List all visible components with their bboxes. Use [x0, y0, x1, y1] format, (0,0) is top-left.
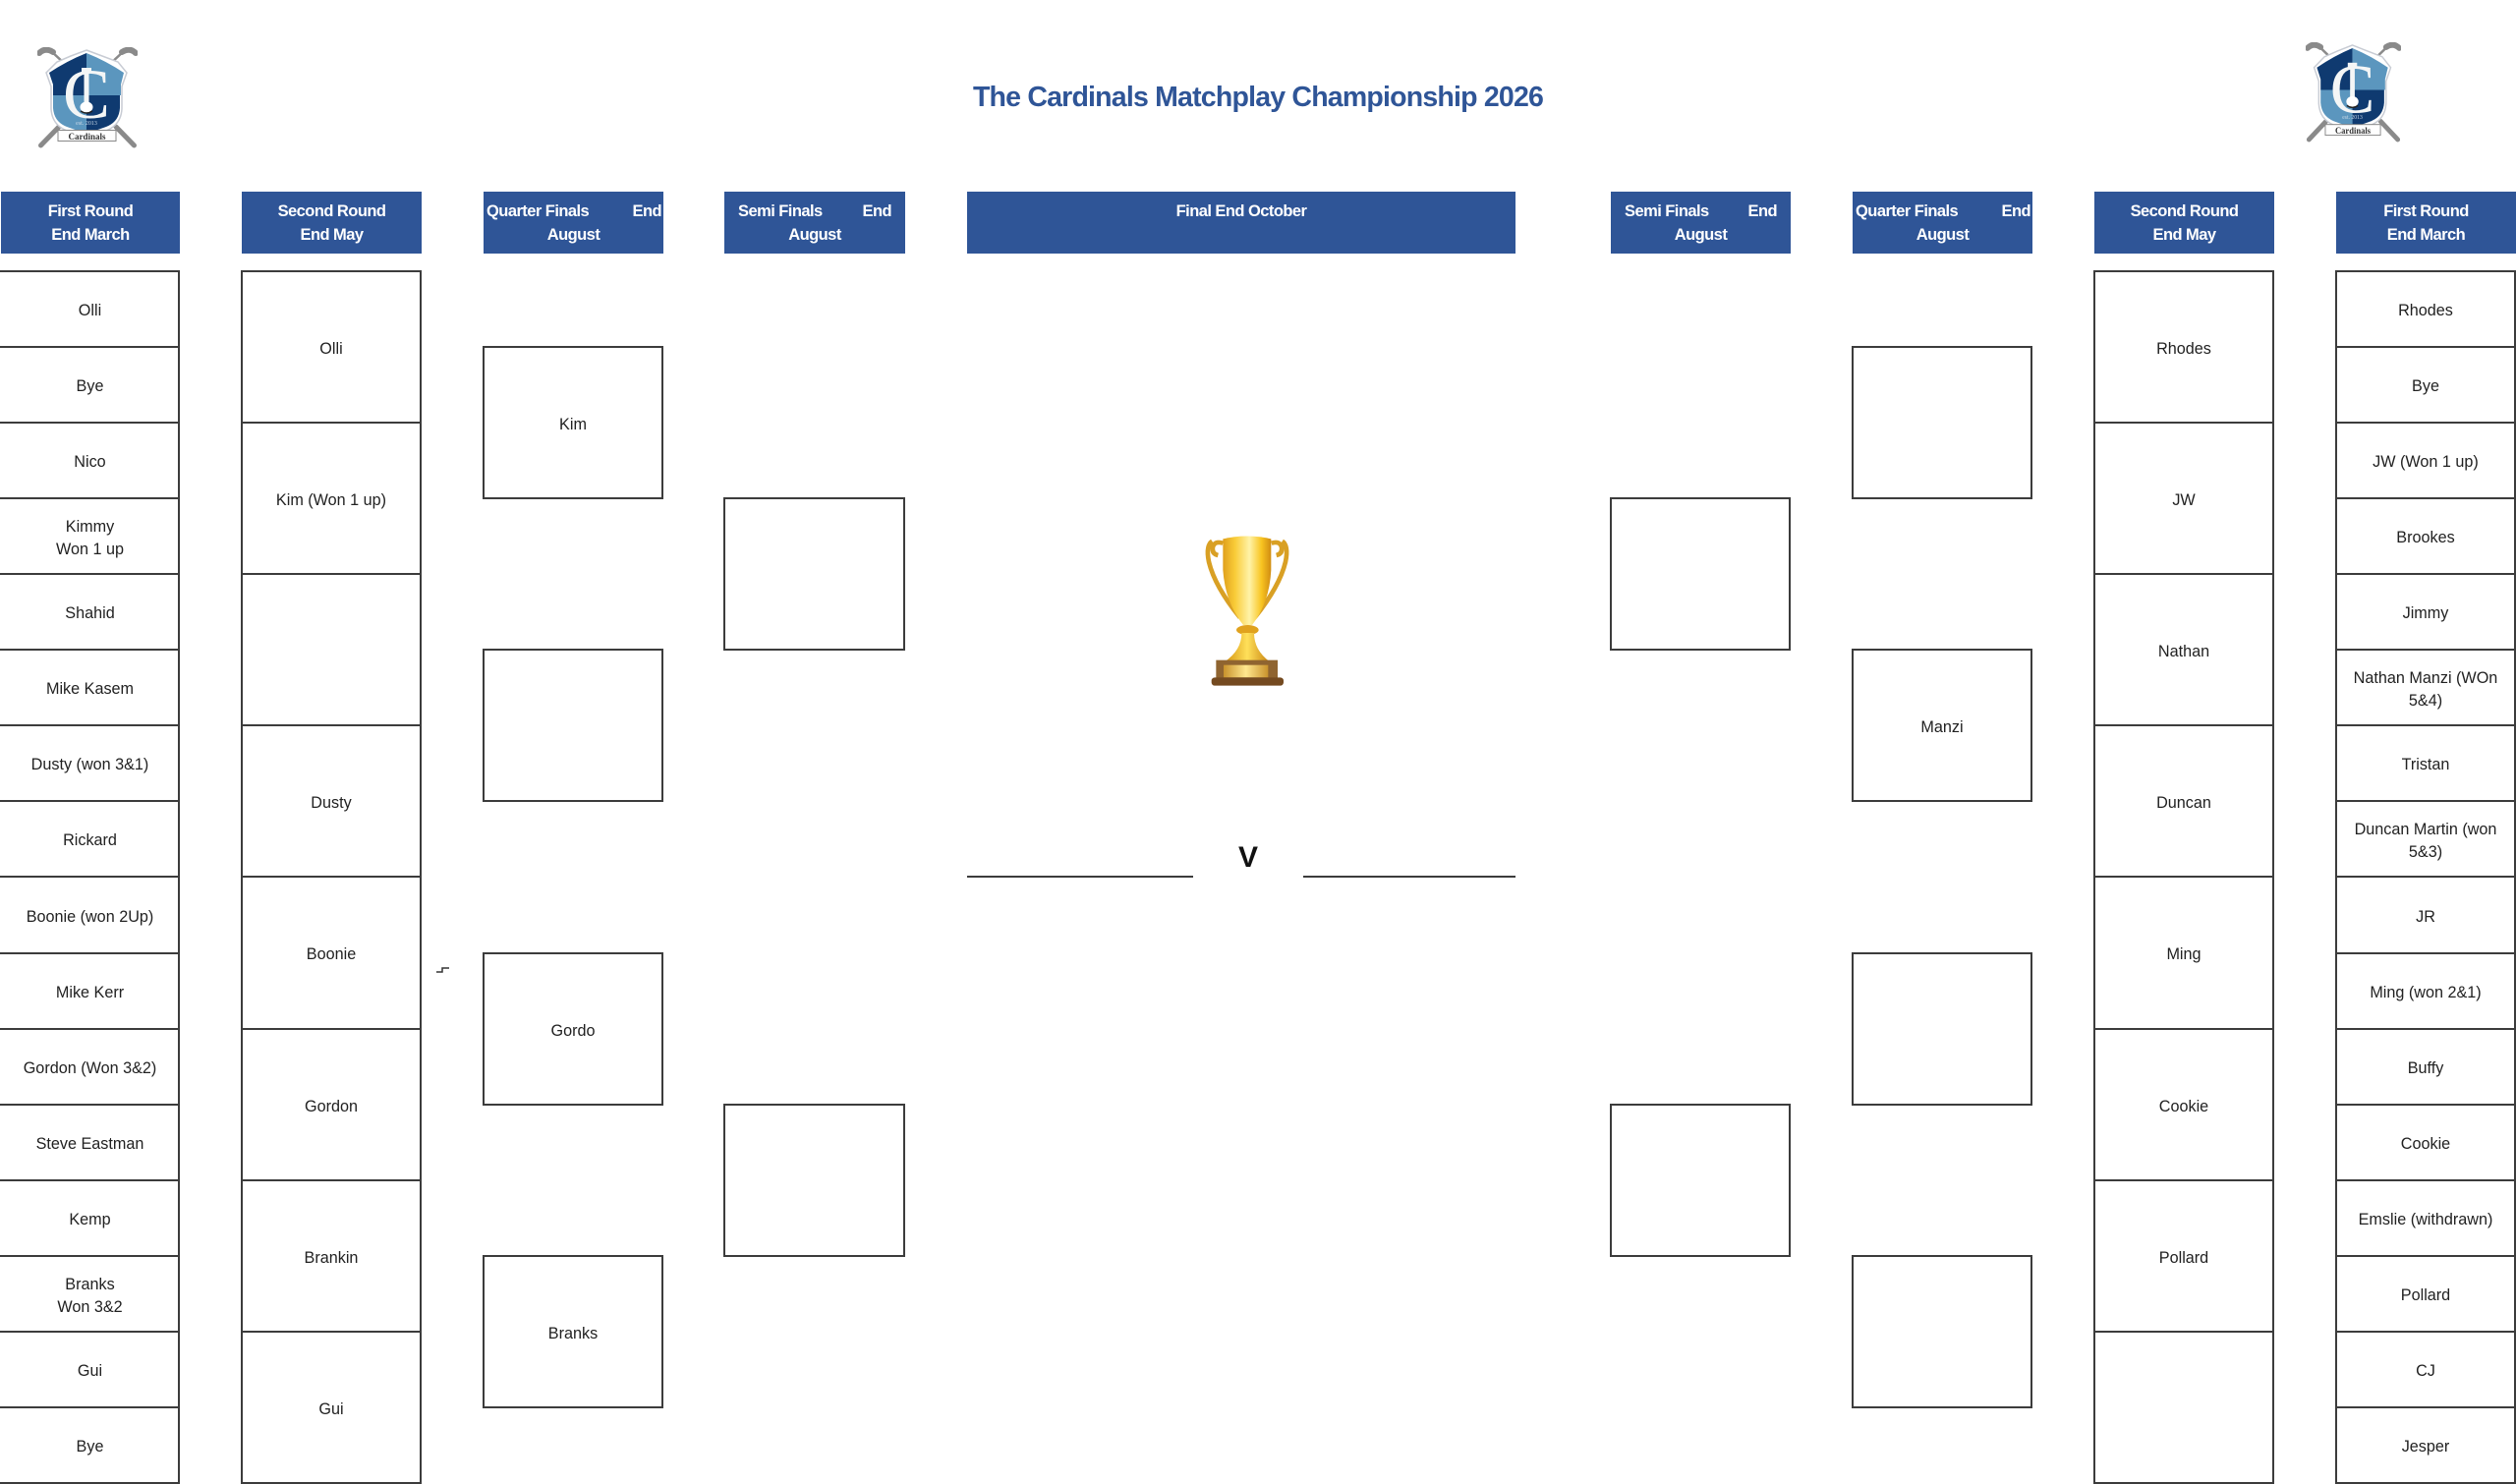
match slot	[2335, 270, 2516, 348]
match slot: Bye	[2412, 377, 2439, 395]
match slot: empty	[723, 1104, 905, 1257]
match slot: Buffy	[2408, 1059, 2443, 1077]
header: quarter finals: End	[2001, 202, 2030, 220]
header: second round	[242, 192, 422, 254]
match slot	[1852, 649, 2032, 802]
match slot: Steve Eastman	[36, 1135, 143, 1153]
match slot: Cookie	[2401, 1135, 2450, 1153]
match slot: 5&3)	[2409, 843, 2442, 861]
match slot: Mike Kasem	[46, 680, 134, 698]
match slot	[2335, 497, 2516, 575]
match slot: Ming	[2166, 945, 2202, 963]
match slot	[0, 497, 180, 575]
match slot: Dusty	[311, 794, 352, 812]
match slot	[0, 270, 180, 348]
match slot: Mike Kerr	[56, 984, 124, 1001]
match slot	[2335, 573, 2516, 651]
match slot	[0, 952, 180, 1030]
match slot	[2335, 1028, 2516, 1106]
header: quarter finals	[1853, 192, 2032, 254]
header: first round: First Round	[48, 202, 133, 220]
match slot: CJ	[2416, 1362, 2435, 1380]
match slot: Jimmy	[2403, 604, 2448, 622]
match slot: JR	[2416, 908, 2435, 926]
match slot	[0, 1104, 180, 1181]
match slot	[2093, 724, 2274, 878]
stray connector mark	[436, 967, 449, 973]
match slot: Pollard	[2401, 1286, 2450, 1304]
match slot: Emslie (withdrawn)	[2359, 1211, 2492, 1228]
match slot: JW (Won 1 up)	[2373, 453, 2479, 471]
match slot	[0, 800, 180, 878]
match slot: Branks	[65, 1276, 115, 1293]
header: first round: First Round	[2383, 202, 2469, 220]
match slot	[241, 1179, 422, 1333]
match slot: Gordon	[305, 1098, 358, 1115]
match slot	[2335, 649, 2516, 726]
match slot	[483, 952, 663, 1106]
match slot: Pollard	[2159, 1249, 2208, 1267]
match slot	[241, 1331, 422, 1484]
logo: Cardinals crest right: Cardinals	[2335, 126, 2372, 136]
match slot	[2335, 1406, 2516, 1484]
match slot	[483, 346, 663, 499]
match slot	[241, 422, 422, 575]
panel: right first round column	[2335, 192, 2516, 1484]
match slot	[2335, 1331, 2516, 1408]
header: quarter finals: August	[1916, 226, 1969, 244]
logo: Cardinals crest right	[2306, 42, 2401, 142]
match slot: Dusty (won 3&1)	[31, 756, 148, 773]
match slot	[0, 1255, 180, 1333]
match slot	[0, 346, 180, 424]
final player line right	[1303, 876, 1515, 878]
header: quarter finals: End	[632, 202, 661, 220]
match slot	[2335, 724, 2516, 802]
logo: Cardinals crest left: C	[63, 55, 110, 134]
match slot	[2335, 1255, 2516, 1333]
match slot: Kemp	[69, 1211, 111, 1228]
match slot: 5&4)	[2409, 692, 2442, 710]
logo: Cardinals crest right: est. 2013	[2342, 115, 2363, 121]
match slot: Brankin	[305, 1249, 358, 1267]
match slot	[0, 724, 180, 802]
match slot	[241, 724, 422, 878]
panel: left second round column	[241, 192, 422, 1484]
match slot: Boonie	[307, 945, 356, 963]
match slot: empty	[723, 497, 905, 651]
logo: Cardinals crest left: Cardinals	[68, 132, 106, 142]
match slot: empty	[1610, 497, 1791, 651]
match slot	[2335, 876, 2516, 954]
match slot	[0, 573, 180, 651]
match slot	[2335, 346, 2516, 424]
match slot: Cookie	[2159, 1098, 2208, 1115]
match slot: empty	[241, 573, 422, 726]
header: semi finals: Semi Finals	[1625, 202, 1709, 220]
header: semi finals: August	[788, 226, 841, 244]
match slot: Jesper	[2402, 1438, 2449, 1455]
match slot	[241, 270, 422, 424]
header: semi finals	[1611, 192, 1791, 254]
match slot: Rhodes	[2398, 302, 2453, 319]
match slot: Gordon (Won 3&2)	[24, 1059, 156, 1077]
match slot: Olli	[79, 302, 101, 319]
match slot: Kim	[559, 416, 587, 433]
header: semi finals: End	[1747, 202, 1777, 220]
header: second round: End May	[2152, 226, 2215, 244]
panel: left semi finals column	[723, 192, 905, 1257]
match slot: Nico	[74, 453, 106, 471]
panel: right second round column	[2093, 192, 2274, 1484]
match slot	[0, 1028, 180, 1106]
match slot	[2093, 422, 2274, 575]
header: first round: End March	[2387, 226, 2465, 244]
match slot: Gordo	[550, 1022, 596, 1040]
header: final	[967, 192, 1515, 254]
match slot: Won 3&2	[57, 1298, 123, 1316]
match slot	[0, 876, 180, 954]
match slot: Nathan	[2158, 643, 2209, 660]
panel: right semi finals column	[1610, 192, 1791, 1257]
match slot	[2093, 573, 2274, 726]
match slot: Shahid	[65, 604, 115, 622]
match slot: empty	[1610, 1104, 1791, 1257]
match slot	[0, 1331, 180, 1408]
match slot	[2335, 1104, 2516, 1181]
match slot: empty	[1852, 346, 2032, 499]
header: quarter finals: Quarter Finals	[1856, 202, 1958, 220]
header: final: Final End October	[1176, 202, 1306, 220]
match slot: Boonie (won 2Up)	[27, 908, 153, 926]
match slot: Manzi	[1920, 718, 1964, 736]
match slot: Gui	[78, 1362, 102, 1380]
match slot	[2093, 876, 2274, 1030]
match slot: Kimmy	[66, 517, 114, 535]
match slot	[483, 1255, 663, 1408]
match slot	[0, 649, 180, 726]
match slot: Gui	[318, 1400, 344, 1418]
logo: Cardinals crest right: C	[2330, 51, 2374, 129]
title: The Cardinals Matchplay Championship 2026	[973, 82, 1543, 113]
match slot	[0, 422, 180, 499]
header: first round: End March	[51, 226, 130, 244]
match slot	[2093, 1028, 2274, 1181]
header: quarter finals: August	[547, 226, 600, 244]
match slot	[2335, 1179, 2516, 1257]
header: second round: Second Round	[278, 202, 385, 220]
match slot	[0, 1179, 180, 1257]
panel: final	[967, 192, 1515, 878]
match slot: empty	[2093, 1331, 2274, 1484]
header: semi finals: Semi Finals	[738, 202, 823, 220]
header: first round	[1, 192, 180, 254]
header: quarter finals: Quarter Finals	[486, 202, 589, 220]
match slot	[241, 1028, 422, 1181]
header: second round	[2094, 192, 2274, 254]
match slot: Branks	[548, 1325, 598, 1342]
header: first round	[2336, 192, 2516, 254]
header: semi finals: August	[1675, 226, 1727, 244]
match slot	[2335, 952, 2516, 1030]
match slot: Rickard	[63, 831, 117, 849]
final player line left	[967, 876, 1193, 878]
match slot: empty	[483, 649, 663, 802]
match slot: Duncan Martin (won	[2355, 820, 2496, 837]
header: second round: Second Round	[2131, 202, 2238, 220]
match slot: empty	[1852, 1255, 2032, 1408]
match slot	[2335, 800, 2516, 878]
logo: Cardinals crest left	[37, 47, 138, 147]
header: semi finals: End	[862, 202, 891, 220]
match slot: Nathan Manzi (WOn	[2354, 668, 2497, 686]
match slot	[2335, 422, 2516, 499]
header: quarter finals	[484, 192, 663, 254]
match slot: Bye	[77, 377, 103, 395]
icon: gold trophy	[1205, 537, 1289, 686]
match slot: JW	[2172, 491, 2196, 509]
match slot: Duncan	[2156, 794, 2211, 812]
match slot: Rhodes	[2156, 340, 2211, 358]
match slot: Bye	[77, 1438, 103, 1455]
match slot: Olli	[319, 340, 343, 358]
versus label: V	[1238, 841, 1258, 874]
panel: left first round column	[0, 192, 180, 1484]
match slot	[241, 876, 422, 1030]
match slot: empty	[1852, 952, 2032, 1106]
header: second round: End May	[301, 226, 364, 244]
header: semi finals	[724, 192, 905, 254]
match slot	[2093, 270, 2274, 424]
match slot: Ming (won 2&1)	[2370, 984, 2482, 1001]
match slot: Kim (Won 1 up)	[276, 491, 386, 509]
panel: right quarter finals column	[1852, 192, 2032, 1408]
match slot: Brookes	[2396, 529, 2455, 546]
match slot: Tristan	[2402, 756, 2449, 773]
match slot	[2093, 1179, 2274, 1333]
logo: Cardinals crest left: est. 2013	[76, 121, 97, 127]
panel: left quarter finals column	[483, 192, 663, 1408]
match slot: Won 1 up	[56, 541, 124, 558]
match slot	[0, 1406, 180, 1484]
